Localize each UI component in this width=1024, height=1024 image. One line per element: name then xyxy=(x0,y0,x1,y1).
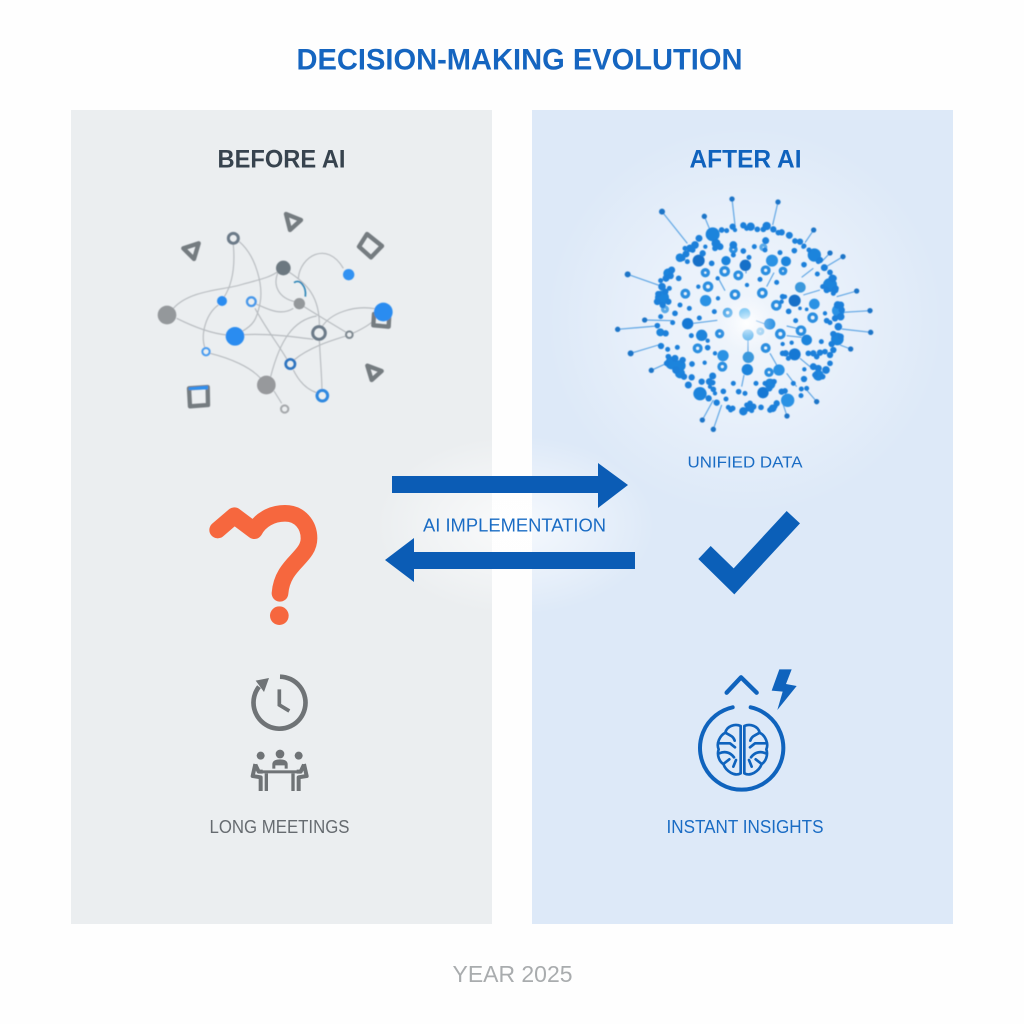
label: long meetings: LONG MEETINGS xyxy=(210,817,350,837)
label: instant insights: INSTANT INSIGHTS xyxy=(666,817,824,837)
chart: tangled network xyxy=(158,214,393,413)
icon: triangles and squares xyxy=(183,214,389,406)
arrow: after to before xyxy=(385,538,635,582)
icon: check mark xyxy=(698,511,800,594)
small nodes xyxy=(654,222,844,415)
nodes xyxy=(158,233,393,413)
icon: brain with lightning bolt xyxy=(700,669,797,790)
icon: question mark xyxy=(218,513,309,625)
heading: before AI: BEFORE AI xyxy=(218,146,346,174)
large nodes xyxy=(655,227,845,407)
panel: before AI xyxy=(71,110,492,924)
icon: people at table xyxy=(253,750,307,791)
label: AI implementation: AI IMPLEMENTATION xyxy=(423,516,606,536)
label: unified data: UNIFIED DATA xyxy=(688,454,803,472)
icon: clock with arrow xyxy=(253,677,305,729)
chart: unified data sphere xyxy=(615,196,873,432)
icon: brain xyxy=(718,725,767,774)
ring nodes xyxy=(663,245,816,375)
ray end dots xyxy=(615,196,873,432)
arrow: before to after xyxy=(392,463,628,508)
center glow xyxy=(718,295,775,352)
panel: after AI xyxy=(532,110,953,924)
heading: after AI: AFTER AI xyxy=(690,146,802,174)
center glow behind arrows xyxy=(375,435,655,615)
title: DECISION-MAKING EVOLUTION xyxy=(296,44,742,76)
footer: year: YEAR 2025 xyxy=(452,961,572,987)
